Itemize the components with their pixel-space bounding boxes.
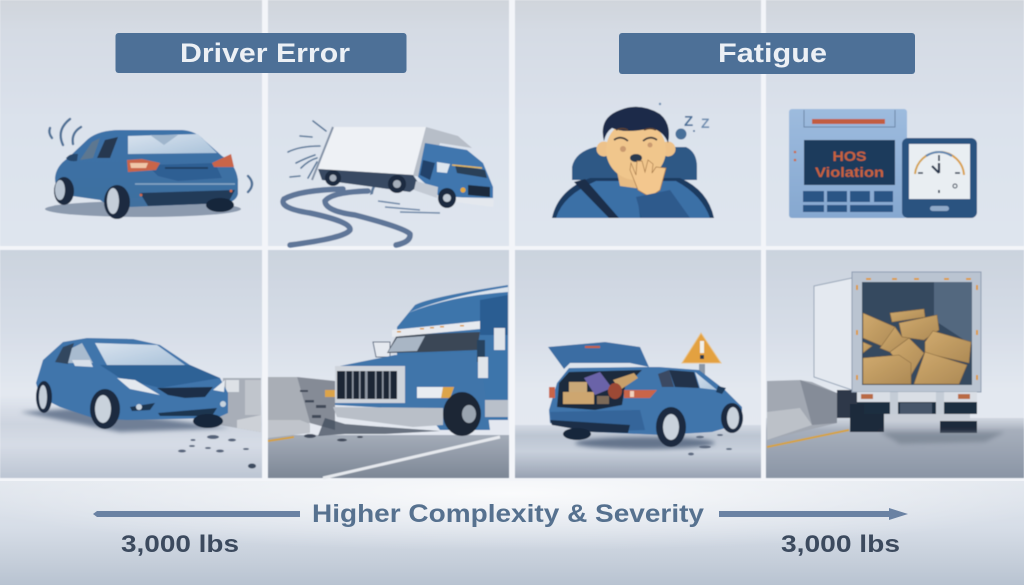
icon: sleep z letters [684, 113, 710, 131]
icon: blue sedan [20, 338, 230, 432]
icon: sleep z letters: Z [701, 115, 710, 131]
icon: semi truck cab [325, 285, 508, 436]
text: hos violation [815, 148, 884, 180]
panel: semi truck hits barrier [268, 250, 509, 478]
panel: fatigue drowsy driver [515, 0, 761, 246]
panel: driver error truck [268, 0, 509, 246]
text: weight right: 3,000 lbs [781, 531, 900, 558]
icon: logging device [789, 109, 907, 218]
icon: warning sign [682, 333, 721, 376]
icon: cardboard boxes [863, 309, 971, 384]
panel: overloaded trailer [766, 250, 1024, 478]
icon: luggage in trunk [563, 372, 638, 404]
panel: overloaded hatchback [515, 250, 761, 478]
heading: driver error [116, 33, 406, 73]
panel: fatigue hours of service violation [766, 0, 1024, 246]
icon: swerving car from the rear [45, 119, 252, 219]
text: hos violation: HOS [832, 148, 866, 164]
icon: concrete barrier [220, 378, 261, 432]
icon: yawning driver [552, 103, 714, 218]
road lane mark [767, 430, 849, 447]
icon: concrete barrier [268, 377, 335, 438]
text: axis label: Higher Complexity & Severity [312, 500, 704, 528]
panel: passenger car hits barrier [0, 250, 262, 478]
text: weight left: 3,000 lbs [121, 531, 239, 558]
icon: debris [880, 432, 1005, 444]
icon: debris [688, 434, 732, 456]
road lane marks [323, 437, 500, 478]
footer band [0, 481, 1024, 585]
heading: fatigue [619, 33, 915, 74]
arrow: right segment [719, 508, 908, 520]
icon: trailer with shifted cargo [814, 272, 981, 433]
icon: skid marks [283, 189, 410, 245]
icon: sleep z letters: Z [684, 113, 693, 130]
heading: fatigue: Fatigue [718, 38, 827, 68]
heading: driver error: Driver Error [180, 38, 351, 68]
icon: debris pile [304, 418, 440, 442]
icon: debris [178, 435, 256, 468]
icon: hatchback with open trunk [548, 342, 743, 449]
arrow: left segment [93, 511, 300, 517]
icon: concrete barrier [767, 380, 837, 440]
icon: jackknifing box truck [288, 121, 494, 213]
panel: driver error passenger car [0, 0, 262, 246]
text: hos violation: Violation [815, 164, 884, 180]
icon: tablet clock [902, 138, 977, 218]
